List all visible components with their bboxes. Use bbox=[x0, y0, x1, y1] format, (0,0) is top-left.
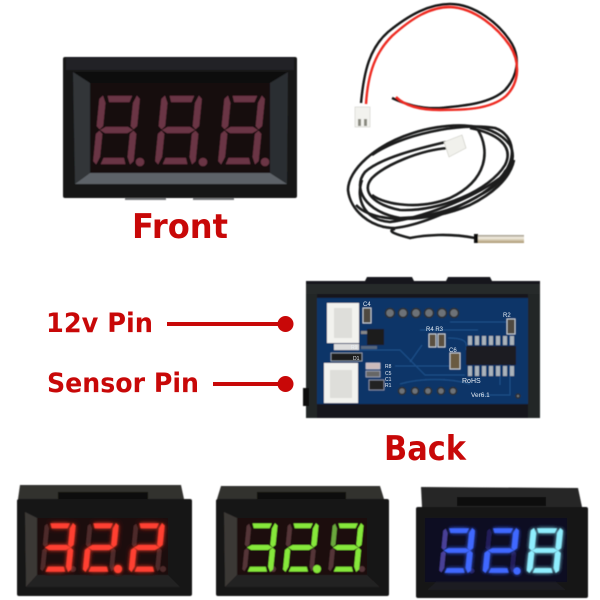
label: 12v Pin: 12v Pin bbox=[46, 308, 153, 339]
board silk labels: C5 bbox=[385, 371, 392, 377]
board silk labels: R9 bbox=[351, 345, 358, 351]
pcb bbox=[317, 298, 528, 404]
red and black power wire with connector bbox=[355, 4, 517, 127]
board silk labels: R1 bbox=[385, 383, 392, 389]
board silk labels: C1 bbox=[385, 377, 392, 383]
arrow: 12v pin pointer bbox=[167, 316, 294, 332]
blue LED module reading 32.8 bbox=[416, 487, 588, 598]
board silk labels: R2 bbox=[503, 313, 511, 319]
back view with circuit board bbox=[303, 277, 540, 418]
board silk labels: RoHS bbox=[462, 378, 481, 385]
board silk labels: R8 bbox=[385, 364, 392, 370]
label: Sensor Pin: Sensor Pin bbox=[47, 368, 199, 399]
green LED module reading 32.9 bbox=[216, 486, 389, 596]
front view of display module bbox=[63, 57, 297, 200]
board silk labels: Ver6.1 bbox=[471, 392, 490, 399]
board silk labels bbox=[351, 302, 511, 399]
board silk labels: D1 bbox=[353, 356, 360, 362]
board silk labels: C6 bbox=[449, 348, 457, 354]
red LED module reading 32.2 bbox=[17, 485, 192, 596]
board silk labels: C4 bbox=[363, 302, 371, 308]
arrow: sensor pin pointer bbox=[213, 376, 294, 392]
heading: Front: Front bbox=[132, 207, 228, 247]
board silk labels: R4 R3 bbox=[426, 327, 444, 333]
black temperature sensor cable with probe bbox=[348, 125, 524, 243]
heading: Back: Back bbox=[384, 429, 467, 469]
